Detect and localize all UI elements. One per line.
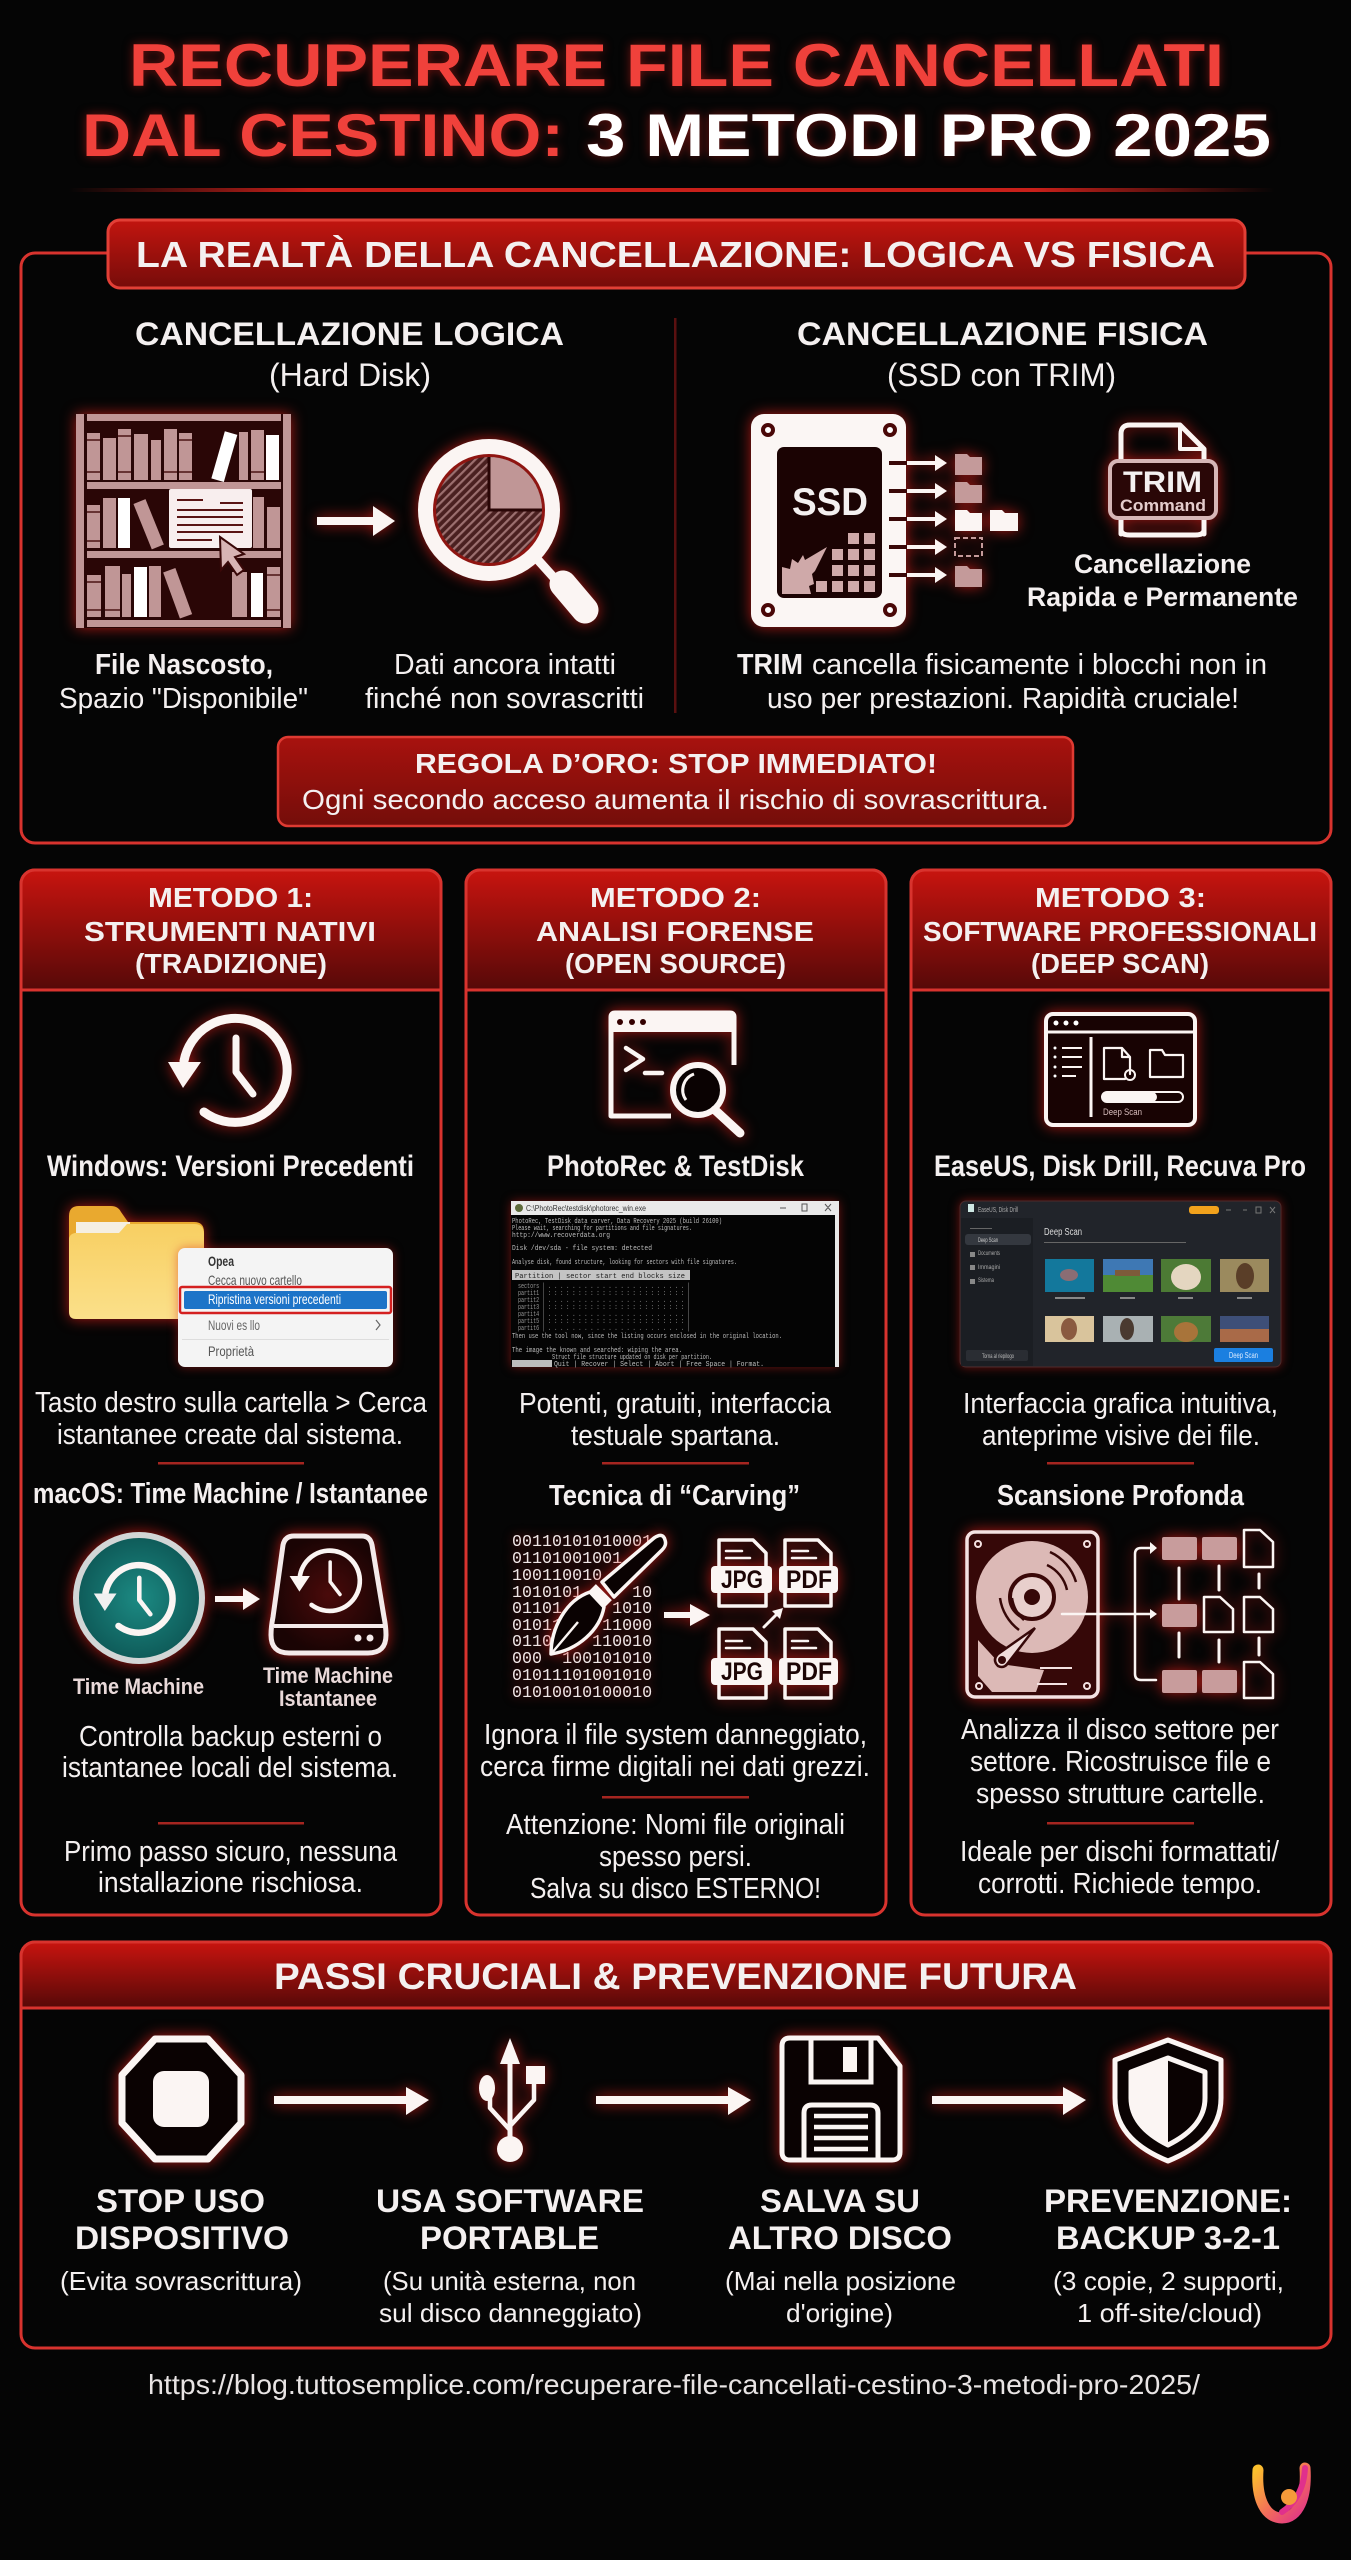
caption: cancellazione rapida (1027, 549, 1298, 612)
caption: dati ancora intatti: finché non sovrascritti (365, 683, 644, 715)
step: salva su: ALTRO DISCO (728, 2220, 952, 2256)
caption: dati ancora intatti (365, 649, 644, 715)
text: analizza: spesso strutture cartelle. (976, 1778, 1265, 1810)
title (82, 32, 1271, 169)
illustration: binary carving with brush: 01101001001 (512, 1550, 622, 1569)
screenshot: terminal: partit4 | . . . . . . . . . . . . . . . . . . . . . . . | (518, 1311, 690, 1319)
heading: cancellazione fisica: CANCELLAZIONE FISICA (797, 316, 1208, 352)
screenshot: terminal: Then use the tool now, since the listing occurs enclosed in the original location. (512, 1333, 782, 1341)
step: stop uso: (Evita sovrascrittura) (60, 2266, 302, 2296)
caption: file nascosto: File Nascosto, (95, 649, 273, 681)
text: potenti (519, 1388, 832, 1452)
screenshot: deep scan app: Deep Scan (1229, 1351, 1258, 1360)
text: ideale: corrotti. Richiede tempo. (978, 1868, 1262, 1900)
illustration: hard disk with file tree (967, 1530, 1273, 1698)
panel heading (21, 870, 441, 990)
screenshot: terminal: The image the known and searched: wiping the area. (512, 1347, 682, 1355)
title: DAL CESTINO: (82, 102, 564, 169)
illustration: binary carving with brush: PDF (786, 1566, 832, 1594)
text: interfaccia grafica: Interfaccia grafica intuitiva, (963, 1388, 1278, 1420)
step: prevenzione: BACKUP 3-2-1 (1056, 2220, 1280, 2256)
panel heading: PASSI CRUCIALI & PREVENZIONE FUTURA (274, 1956, 1077, 1997)
step: salva su (725, 2183, 956, 2328)
text: ignora: cerca firme digitali nei dati grezzi. (480, 1751, 870, 1783)
step: prevenzione (1044, 2183, 1292, 2328)
illustration: binary carving with brush: 01011101001010 (512, 1667, 652, 1686)
subheading: windows: Windows: Versioni Precedenti (47, 1150, 414, 1183)
subheading: macOS: macOS: Time Machine / Istantanee (33, 1478, 428, 1510)
screenshot: terminal: C:\PhotoRec\testdisk\photorec_win.exe (526, 1204, 646, 1213)
illustration: binary carving with brush: 100110010 (512, 1567, 602, 1586)
heading: cancellazione logica: CANCELLAZIONE LOGICA (135, 316, 564, 352)
panel heading: SOFTWARE PROFESSIONALI (923, 916, 1317, 947)
step: salva su: SALVA SU (760, 2183, 920, 2219)
text: attenzione (506, 1809, 845, 1905)
text: ignora (480, 1719, 870, 1783)
panel heading (911, 870, 1331, 990)
text: analizza: settore. Ricostruisce file e (970, 1746, 1271, 1778)
icon: history clock (168, 1018, 287, 1122)
illustration: folder with context menu: Proprietà (208, 1343, 254, 1359)
title: RECUPERARE FILE CANCELLATI (129, 32, 1224, 99)
screenshot: deep scan app: Torna al riepilogo (982, 1354, 1014, 1360)
panel heading: METODO 2: (590, 882, 761, 913)
screenshot: terminal: Struct file structure updated on disk per partition. (552, 1354, 712, 1362)
text: attenzione: Attenzione: Nomi file originali (506, 1809, 845, 1841)
label: time machine istantanee (263, 1663, 393, 1711)
screenshot: deep scan app: Deep Scan (1044, 1227, 1082, 1238)
icon: TRIM command: Command (1120, 496, 1206, 515)
text: potenti: Potenti, gratuiti, interfaccia (519, 1388, 832, 1420)
heading: cancellazione logica: (Hard Disk) (269, 357, 431, 393)
screenshot: deep scan app: EaseUS, Disk Drill (978, 1207, 1018, 1214)
caption: TRIM: TRIM (737, 649, 803, 681)
screenshot: terminal: Analyse disk, found structure, looking for sectors with file signatures. (512, 1259, 737, 1267)
icon: TRIM command: TRIM (1123, 466, 1202, 499)
illustration: binary carving with brush: 0110 110010 (512, 1633, 652, 1652)
step: usa software: PORTABLE (420, 2220, 599, 2256)
panel heading: (DEEP SCAN) (1031, 948, 1209, 979)
caption: TRIM: uso per prestazioni. Rapidità cruciale! (767, 683, 1239, 715)
title: 3 METODI PRO 2025 (586, 102, 1271, 169)
screenshot: terminal: Please wait, searching for partitions and file signatures. (512, 1225, 692, 1233)
text: controlla backup: istantanee locali del sistema. (62, 1752, 398, 1784)
step: stop uso (60, 2183, 302, 2296)
panel: metodo 1 (21, 870, 441, 1915)
step: prevenzione: (3 copie, 2 supporti, (1053, 2266, 1284, 2296)
label: time machine istantanee: Time Machine (263, 1663, 393, 1688)
illustration: binary carving with brush: 01101 1010 (512, 1600, 652, 1619)
text: ideale: Ideale per dischi formattati/ (960, 1836, 1280, 1868)
icon: SSD: SSD (792, 481, 868, 524)
illustration: folder with context menu (69, 1206, 393, 1367)
icon: usb (479, 2038, 545, 2162)
logo (1258, 2468, 1305, 2518)
arrow (317, 506, 395, 536)
panel heading: LA REALTÀ DELLA CANCELLAZIONE: LOGICA VS FISICA (136, 234, 1215, 275)
screenshot: terminal: partit3 | : : : : : : : : : : : : : : : : : : : : : : : | (518, 1304, 690, 1312)
panel heading: ANALISI FORENSE (536, 916, 814, 947)
caption: TRIM: cancella fisicamente i blocchi non in (812, 649, 1267, 681)
screenshot: terminal: sectors | . . . . . . . . . . . . . . . . . . . . . . . | (518, 1283, 690, 1291)
icon: shield (1115, 2040, 1221, 2161)
illustration: binary carving with brush: 01011 11000 (512, 1617, 652, 1636)
text: controlla backup: Controlla backup esterni o (79, 1721, 382, 1753)
step: prevenzione: 1 off-site/cloud) (1077, 2298, 1262, 2328)
icon: software window (1046, 1014, 1195, 1125)
subheading: photorec: PhotoRec & TestDisk (547, 1150, 804, 1183)
screenshot: terminal: Partition | sector start end blocks size (515, 1273, 685, 1281)
text: controlla backup (62, 1721, 398, 1784)
caption: file nascosto: Spazio "Disponibile" (59, 683, 308, 715)
text: analizza: Analizza il disco settore per (961, 1714, 1279, 1746)
label: time machine: Time Machine (73, 1674, 204, 1699)
panel: metodo 3 (911, 870, 1331, 1915)
screenshot: deep scan app: Immagini (978, 1265, 1000, 1271)
caption: cancellazione rapida: Rapida e Permanente (1027, 582, 1298, 612)
callout: regola d'oro (278, 737, 1073, 826)
arrow (215, 1588, 260, 1610)
callout: regola d'oro: Ogni secondo acceso aumenta il rischio di sovrascrittura. (302, 784, 1049, 815)
text: tasto destro (35, 1387, 428, 1451)
panel heading: METODO 3: (1035, 882, 1206, 913)
text: ignora: Ignora il file system danneggiato, (484, 1719, 867, 1751)
illustration: binary carving with brush: 1010101 10 (512, 1584, 652, 1603)
step: salva su: (Mai nella posizione (725, 2266, 956, 2296)
panel: metodo 2 (466, 870, 886, 1915)
arrow (596, 2087, 751, 2115)
screenshot: deep scan app: Sistema (978, 1278, 994, 1284)
panel heading (108, 220, 1245, 288)
text: primo passo: installazione rischiosa. (98, 1867, 363, 1899)
screenshot: deep scan app: Deep Scan (978, 1238, 998, 1244)
icon: bookshelf (76, 414, 291, 628)
illustration: binary carving with brush (512, 1533, 838, 1703)
source url: https://blog.tuttosemplice.com/recuperare-file-cancellati-cestino-3-metodi-pro-2025/ (148, 2369, 1200, 2400)
illustration: folder with context menu: Opea (208, 1253, 234, 1269)
text: attenzione: Salva su disco ESTERNO! (530, 1873, 821, 1905)
panel heading: METODO 1: (148, 882, 313, 913)
text: analizza (961, 1714, 1279, 1810)
text: ideale (960, 1836, 1280, 1900)
caption: dati ancora intatti: Dati ancora intatti (394, 649, 616, 681)
caption: file nascosto (59, 649, 308, 715)
icon: SSD (751, 414, 1018, 627)
text: primo passo (64, 1836, 398, 1899)
heading: cancellazione fisica (797, 316, 1208, 393)
step: usa software: USA SOFTWARE (376, 2183, 644, 2219)
icon: floppy (782, 2038, 900, 2160)
screenshot: terminal: partit1 | : : : : : : : : : : : : : : : : : : : : : : : | (518, 1290, 690, 1298)
step: stop uso: DISPOSITIVO (75, 2220, 289, 2256)
arrow (932, 2087, 1086, 2115)
screenshot: terminal: partit6 | . . . . . . . . . . . . . . . . . . . . . . . | (518, 1325, 690, 1333)
icon: magnifier with pie (426, 446, 585, 610)
step: usa software: sul disco danneggiato) (379, 2298, 642, 2328)
callout: regola d'oro: REGOLA D’ORO: STOP IMMEDIATO! (415, 748, 937, 779)
text: tasto destro: istantanee create dal sistema. (57, 1419, 403, 1451)
heading: cancellazione fisica: (SSD con TRIM) (887, 357, 1116, 393)
caption: TRIM (737, 649, 1267, 715)
icon: time machine (76, 1535, 202, 1661)
panel heading (21, 1942, 1331, 2008)
illustration: folder with context menu: Cecca nuovo cartello (208, 1272, 302, 1288)
text: potenti: testuale spartana. (571, 1420, 780, 1452)
screenshot: deep scan app (960, 1201, 1281, 1367)
panel heading (466, 870, 886, 990)
screenshot: terminal (511, 1201, 839, 1369)
heading: cancellazione logica (135, 316, 564, 393)
panel: la realtà della cancellazione (21, 220, 1331, 843)
text: primo passo: Primo passo sicuro, nessuna (64, 1836, 398, 1868)
icon: stop (122, 2039, 241, 2159)
panel heading: (OPEN SOURCE) (565, 948, 786, 979)
illustration: binary carving with brush: 01010010100010 (512, 1684, 652, 1703)
text: interfaccia grafica (963, 1388, 1278, 1452)
illustration: binary carving with brush: JPG (721, 1658, 763, 1686)
subheading: carving: Tecnica di “Carving” (549, 1480, 800, 1512)
icon: terminal with magnifier (609, 1012, 740, 1133)
panel: passi cruciali (21, 1942, 1331, 2348)
screenshot: terminal: partit2 | . . . . . . . . . . . . . . . . . . . . . . . | (518, 1297, 690, 1305)
illustration: binary carving with brush: 000 100101010 (512, 1650, 652, 1669)
screenshot: terminal: Quit | Recover | Select | Abort | Free Space | Format. (554, 1361, 764, 1369)
step: usa software: (Su unità esterna, non (383, 2266, 636, 2296)
panel heading: (TRADIZIONE) (135, 948, 327, 979)
illustration: folder with context menu: Ripristina versioni precedenti (208, 1291, 341, 1307)
screenshot: deep scan app: Documents (978, 1251, 1000, 1257)
step: usa software (376, 2183, 644, 2328)
icon: snapshot drive (271, 1536, 386, 1653)
text: interfaccia grafica: anteprime visive dei file. (982, 1420, 1260, 1452)
illustration: binary carving with brush: 00110101010001 (512, 1533, 652, 1552)
label: time machine istantanee: Istantanee (279, 1686, 377, 1711)
icon: software window: Deep Scan (1103, 1107, 1142, 1117)
step: prevenzione: PREVENZIONE: (1044, 2183, 1292, 2219)
subheading: scansione profonda: Scansione Profonda (997, 1480, 1245, 1512)
screenshot: terminal: PhotoRec, TestDisk data carver, Data Recovery 2025 (build 26100) (512, 1218, 722, 1226)
icon: TRIM command (1110, 425, 1216, 535)
illustration: binary carving with brush: PDF (786, 1658, 832, 1686)
text: attenzione: spesso persi. (599, 1841, 752, 1873)
panel heading: STRUMENTI NATIVI (84, 916, 376, 947)
caption: cancellazione rapida: Cancellazione (1074, 549, 1251, 579)
screenshot: terminal: http://www.recoverdata.org (512, 1232, 610, 1240)
screenshot: terminal: partit5 | : : : : : : : : : : : : : : : : : : : : : : : | (518, 1318, 690, 1326)
step: salva su: d'origine) (786, 2298, 893, 2328)
illustration: folder with context menu: Nuovi es llo (208, 1317, 260, 1333)
text: tasto destro: Tasto destro sulla cartella > Cerca (35, 1387, 428, 1419)
illustration: binary carving with brush: JPG (721, 1566, 763, 1594)
screenshot: terminal: Disk /dev/sda - file system: detected (512, 1245, 652, 1253)
arrow (274, 2087, 429, 2115)
step: stop uso: STOP USO (96, 2183, 265, 2219)
